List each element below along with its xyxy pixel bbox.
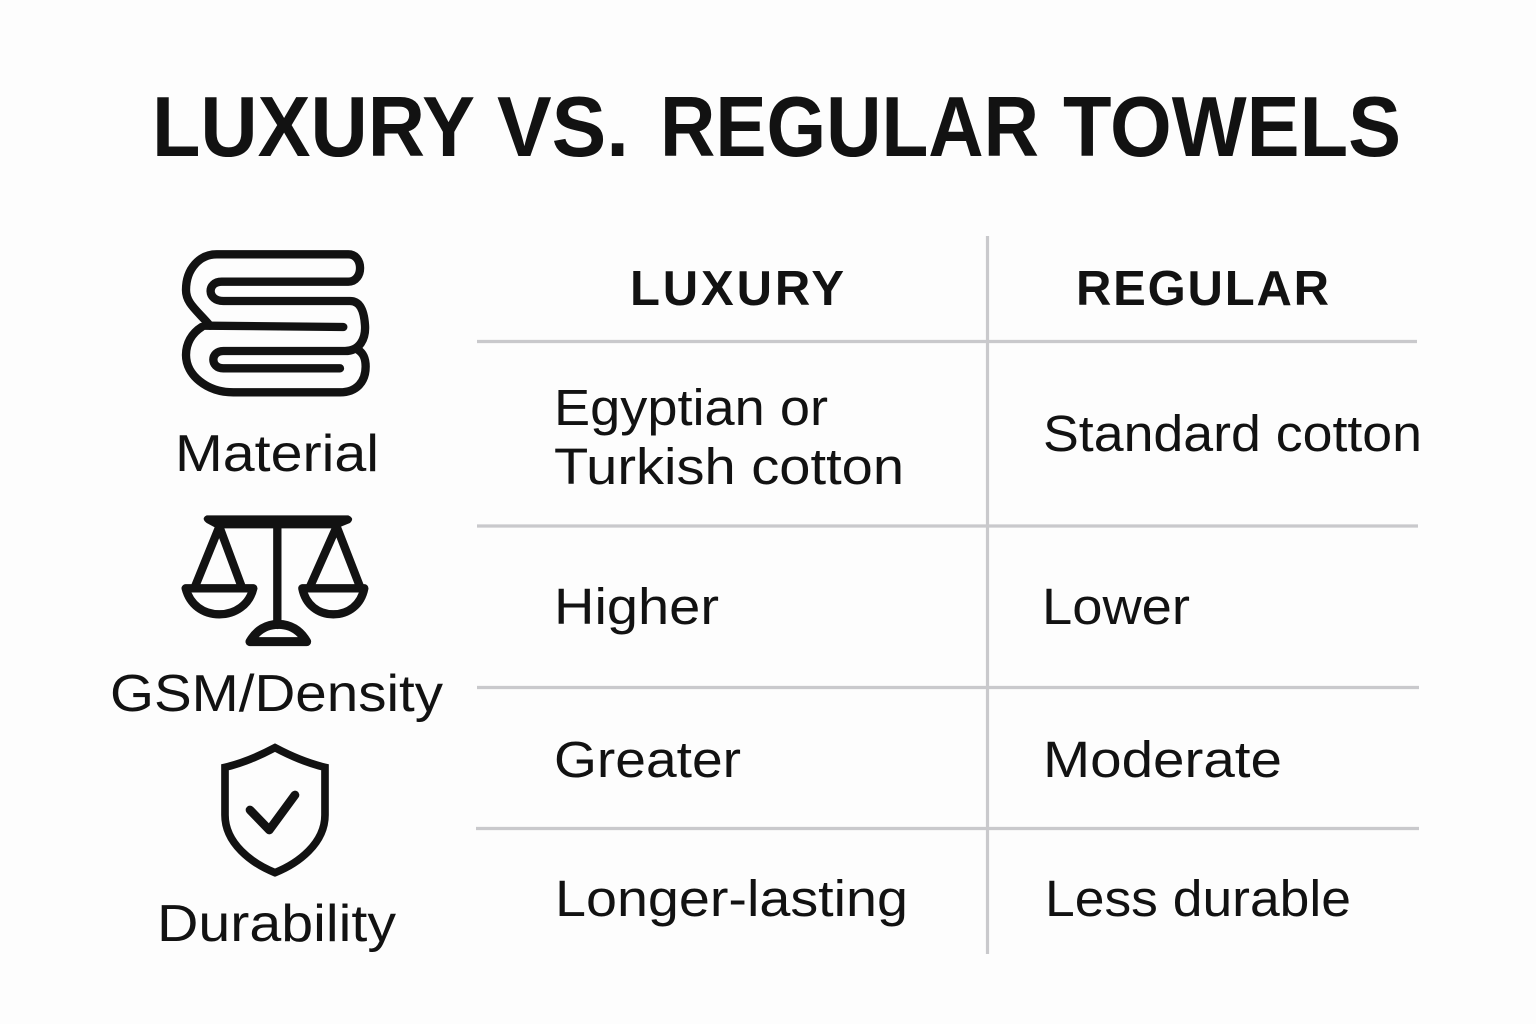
material: luxury value [554,379,904,495]
title: LUXURY [152,80,475,175]
gsm: regular value: Lower [1042,578,1190,635]
lifespan: luxury value: Longer-lasting [555,870,908,927]
lifespan: regular value: Less durable [1045,870,1351,927]
column heading: regular: REGULAR [1076,262,1329,316]
label: gsm/density: GSM/Density [110,665,443,723]
title: TOWELS [1063,80,1401,175]
column heading: luxury: LUXURY [630,262,844,316]
icon: folded towels [186,254,366,392]
icon: shield with check mark [225,748,325,873]
comparison table [476,236,1422,954]
label: durability: Durability [157,895,396,953]
durability: luxury value: Greater [554,731,741,788]
title [152,80,1401,175]
title: VS. [497,80,629,175]
icon: balance scales [186,515,364,642]
gsm: luxury value: Higher [554,578,719,635]
durability: regular value: Moderate [1043,731,1282,788]
material: regular value: Standard cotton [1043,405,1422,462]
material: luxury value: Egyptian or [554,379,828,436]
label: material: Material [175,425,379,483]
material: luxury value: Turkish cotton [554,438,904,495]
title: REGULAR [660,80,1039,175]
